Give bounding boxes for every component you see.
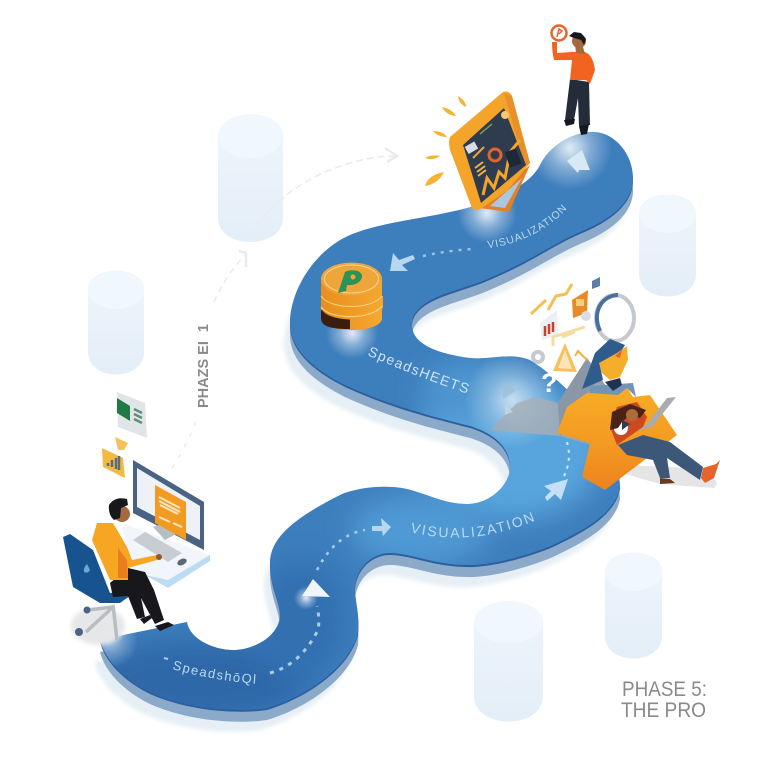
legs [618,435,703,480]
hood [582,339,625,389]
desk [122,523,210,587]
grey badge [581,311,591,321]
hand [156,554,162,560]
connector chart [531,284,572,314]
ring badge [552,26,566,40]
hex badge [531,350,545,364]
arrow: pointing left [390,253,415,271]
dashed arrow: lower faint path to first cylinder [172,251,246,468]
shoes [564,119,589,135]
phase 5 label: PHASE 5: [622,678,707,701]
head [114,506,130,522]
coin green p mark [338,270,362,293]
desk worker scene [63,392,210,645]
pale cylinder lower right [605,552,662,658]
dashboard panel with rays [425,92,530,212]
phase 5 label [621,678,707,722]
monitor stand [153,523,178,540]
collar [605,378,622,391]
icon: coin stack [321,262,383,330]
seated figure shadow [625,465,717,488]
orange arm and torso [552,42,595,84]
reader head [610,404,646,430]
panel frame [449,92,530,210]
neck and head [575,44,585,54]
pale cylinder bottom centre [474,601,543,722]
blue shoulders [590,383,636,397]
phase 5 label: THE PRO [621,699,706,722]
arrows on road [164,150,590,673]
road ground shadow [94,154,627,732]
panel chart content [465,111,521,195]
dots: to right arrow [317,530,365,570]
shoes [140,615,174,631]
chair badge [84,564,90,573]
small folder icon [115,437,128,450]
chair base [75,605,117,640]
pale cylinder top left [218,114,283,242]
magnifier ring [596,295,634,341]
panel tail [480,165,530,212]
dashed arrow: to top panel [250,148,397,235]
phase 1 vertical label: PHAZS EI1 [196,324,212,408]
small orange triangle [553,343,577,372]
floor shadow [71,607,125,645]
sun rays [425,96,466,186]
winding road [94,132,634,732]
excel card [117,392,147,438]
mountain with question mark [490,343,610,445]
shirt of reader [610,402,647,445]
trousers [110,568,164,624]
bar card [540,310,558,340]
panel dark screen [463,108,526,203]
keyboard [133,532,182,562]
shoes [701,460,720,483]
dots: bottom curve [270,606,319,673]
pale cylinder left [88,270,144,374]
label: spreadsheet bottom: SpeadshōQl [173,661,256,686]
legs [565,79,590,126]
floating analytics icons [531,277,600,364]
orange arrow shape [557,387,677,490]
road top surface [100,132,633,710]
arrow: up right [544,479,568,501]
infographic canvas [63,24,720,732]
small card [592,277,600,289]
question mark: ? [541,368,558,398]
orange screen card [155,485,186,540]
laptop [638,397,676,431]
label: visualization lower: VISUALIZATION [412,512,534,538]
pale cylinder right [639,194,696,296]
person standing at top with ring [552,26,595,135]
chair seat and back [63,534,138,603]
monitor [133,460,204,550]
dots: bottom label lead [164,658,168,659]
road side thickness [100,144,633,722]
label: visualization upper: VISUALIZATION [487,204,566,248]
arrow: right [372,518,391,536]
sweater [92,523,157,580]
road labels [173,204,566,686]
arrow: top [567,150,590,173]
face [599,346,628,380]
label: spreadsheets: SpeadsHEETS [368,347,469,393]
arrow: bottom up [302,579,330,597]
white arrows on haze [503,382,517,399]
pale lines [553,327,585,346]
yellow bar chart icon [102,448,125,478]
glow spots [538,132,610,188]
dots: upper road [423,249,474,256]
seated figure on orange shape [557,339,720,490]
orange card [572,290,588,318]
mouse [176,557,188,567]
dots: upward [564,442,569,476]
